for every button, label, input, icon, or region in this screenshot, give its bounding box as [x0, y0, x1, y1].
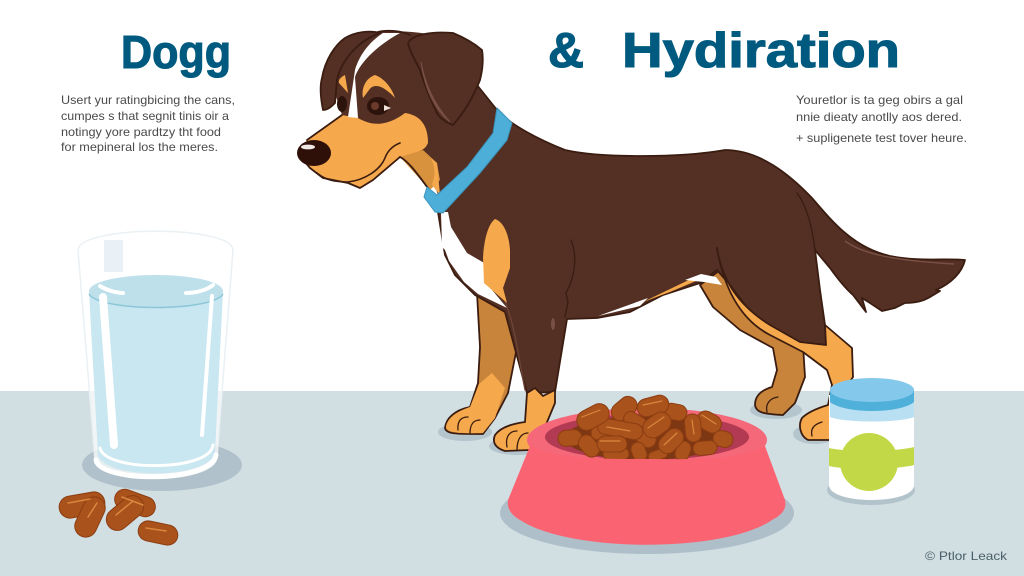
text block: left: cumpes s that segnit tinis oir a	[61, 109, 229, 123]
far front leg lower orange	[446, 373, 505, 433]
label circle	[840, 433, 898, 491]
near front leg lower	[494, 388, 555, 451]
light blue band	[830, 395, 914, 422]
text block: left: Usert yur ratingbicing the cans,	[61, 93, 235, 107]
text block: right: Youretlor is ta geg obirs a gal	[796, 93, 963, 107]
kibble in bowl	[557, 393, 735, 464]
right eye	[367, 97, 391, 115]
right eyebrow	[363, 75, 395, 98]
bowl interior	[545, 414, 749, 460]
muzzle	[300, 113, 428, 188]
mouth	[317, 143, 400, 182]
body creases	[505, 193, 815, 390]
footer credit: © Ptlor Leack	[925, 549, 1008, 563]
bowl front	[508, 446, 785, 545]
glass of water	[78, 231, 242, 491]
nose	[297, 140, 331, 166]
chest white patch	[441, 212, 507, 308]
left eyebrow	[339, 75, 348, 93]
tail highlight	[845, 241, 954, 264]
white head stripe	[348, 33, 400, 118]
right ear	[408, 32, 483, 125]
can lid	[830, 390, 914, 411]
label band	[829, 447, 914, 469]
far front leg	[445, 293, 517, 434]
water surface	[89, 275, 223, 307]
kibble base	[565, 416, 725, 460]
can body	[829, 395, 914, 500]
paw shadows	[438, 401, 837, 455]
glass body	[78, 231, 233, 478]
text block: left: notingy yore pardtzy tht food	[61, 125, 221, 139]
bowl rim	[527, 408, 767, 472]
collar	[424, 108, 512, 213]
can shadow	[827, 475, 915, 505]
dog	[297, 31, 965, 451]
kibble pile on table	[57, 486, 180, 547]
title: ampersand: &	[548, 24, 584, 78]
toes	[458, 397, 822, 450]
text block: right	[796, 93, 967, 145]
muzzle outline	[305, 115, 400, 188]
belly patches	[598, 298, 648, 316]
dog body and tail	[438, 110, 965, 393]
text block: right: + supligenete test tover heure.	[796, 131, 967, 145]
near hind leg and stripe	[717, 248, 853, 440]
text block: right: nnie dieaty anotlly aos dered.	[796, 110, 962, 124]
supplement can	[827, 378, 915, 505]
head base	[334, 31, 505, 200]
title: Dogg: Dogg	[121, 26, 231, 78]
glass shadow	[82, 439, 242, 491]
dog food bowl	[500, 393, 794, 554]
neck tan	[400, 150, 440, 190]
head and neck outline	[378, 31, 497, 110]
text block: left: for mepineral los the meres.	[61, 140, 218, 154]
shoulder orange patch	[483, 219, 510, 303]
bowl shadow	[500, 472, 794, 554]
ear highlight	[421, 62, 450, 122]
kibble highlights	[582, 401, 716, 445]
far hind leg	[700, 270, 805, 415]
text block: left	[61, 93, 235, 154]
table surface	[0, 391, 1024, 576]
left ear	[321, 32, 380, 110]
left eye	[337, 96, 347, 112]
title: Hydiration: Hydiration	[622, 24, 900, 78]
water	[89, 276, 223, 473]
glass highlights	[96, 285, 216, 477]
head	[297, 31, 505, 200]
